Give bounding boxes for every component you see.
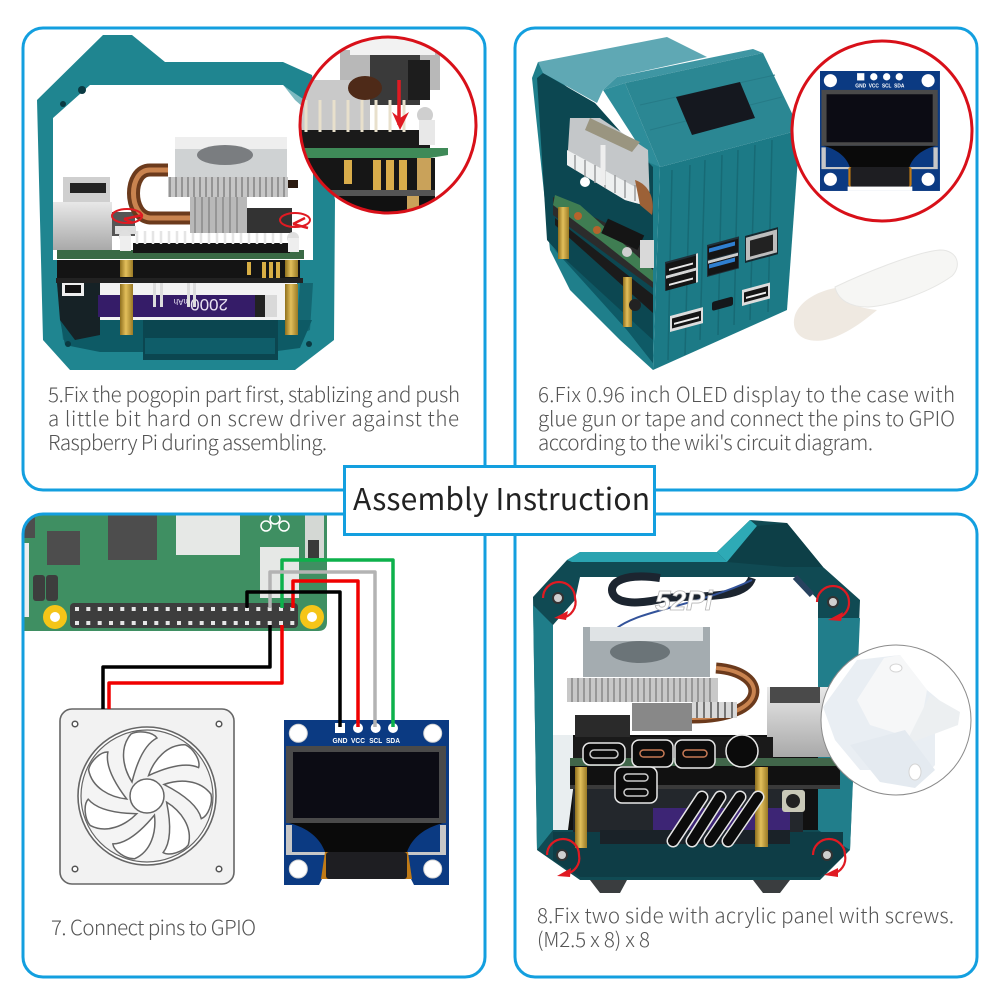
OLED module small [820,71,940,191]
52Pi logo: 52Pi [655,585,714,616]
step 5 text: Raspberry Pi during assembling. [48,426,327,456]
title box [344,466,654,534]
OLED module: GND [332,736,348,745]
OLED module small: VCC [869,84,879,90]
OLED module small: GND [855,84,866,90]
USB bottom [670,307,703,332]
step 8 text: 8.Fix two side with acrylic panel with screws. [537,899,954,929]
raspberry pi board [22,514,327,631]
wires [103,560,393,727]
vent slots [673,797,758,841]
magnifier circle: acrylic film [821,645,971,795]
cable loop [612,576,752,602]
GPIO header [70,603,298,628]
battery label: 2000mAh [174,295,228,314]
magnifier circle: pogopin detail [300,37,476,216]
OLED module: SCL [369,736,383,745]
USB stack left [665,253,698,291]
step 8 text: (M2.5 x 8) x 8 [537,923,650,953]
step 6 text: 6.Fix 0.96 inch OLED display to the case with [538,378,955,408]
screws with red arrows [543,582,849,877]
title text: Assembly Instruction [353,475,650,519]
3D teal case [532,37,800,370]
OLED module: SDA [386,736,401,745]
step 7 text: 7. Connect pins to GPIO [51,911,256,941]
ports on case [665,227,778,332]
step 6 text: glue gun or tape and connect the pins to GPIO [538,402,955,432]
step 6 text: according to the wiki's circuit diagram. [538,426,873,456]
red arrow [397,80,401,125]
teal case frame front [533,520,860,880]
panel: step 8 [515,514,977,977]
interior: cooler, boards, battery [553,576,843,877]
USB3 stack [707,236,739,277]
fan [60,709,234,884]
HDMI opening [712,296,733,311]
step 8 text [537,899,954,953]
feet [590,880,790,893]
panel: step 5 [23,28,485,490]
raspberry pi stack with cooler [53,137,304,340]
magnifier circle: OLED [792,41,972,221]
step 5 text: 5.Fix the pogopin part first, stablizing and push [48,378,460,408]
ethernet [745,227,778,263]
USB right [742,282,770,306]
panel: step 6 [515,28,977,490]
OLED module [284,720,449,885]
OLED module: VCC [351,736,366,745]
acrylic tape strip [794,250,957,341]
button [782,790,805,812]
red rotation arrows [112,209,310,228]
teal case frame [37,35,335,370]
connector openings [583,735,758,803]
step 5 text: a little bit hard on screw driver against the [48,402,459,432]
OLED module small: SCL [882,84,892,90]
step 6 text [538,378,955,456]
OLED module small: SDA [894,84,904,90]
panel: step 7 [22,514,485,977]
OLED window [676,82,755,135]
step 5 text [48,378,460,456]
internal boards and cooler [553,118,654,327]
